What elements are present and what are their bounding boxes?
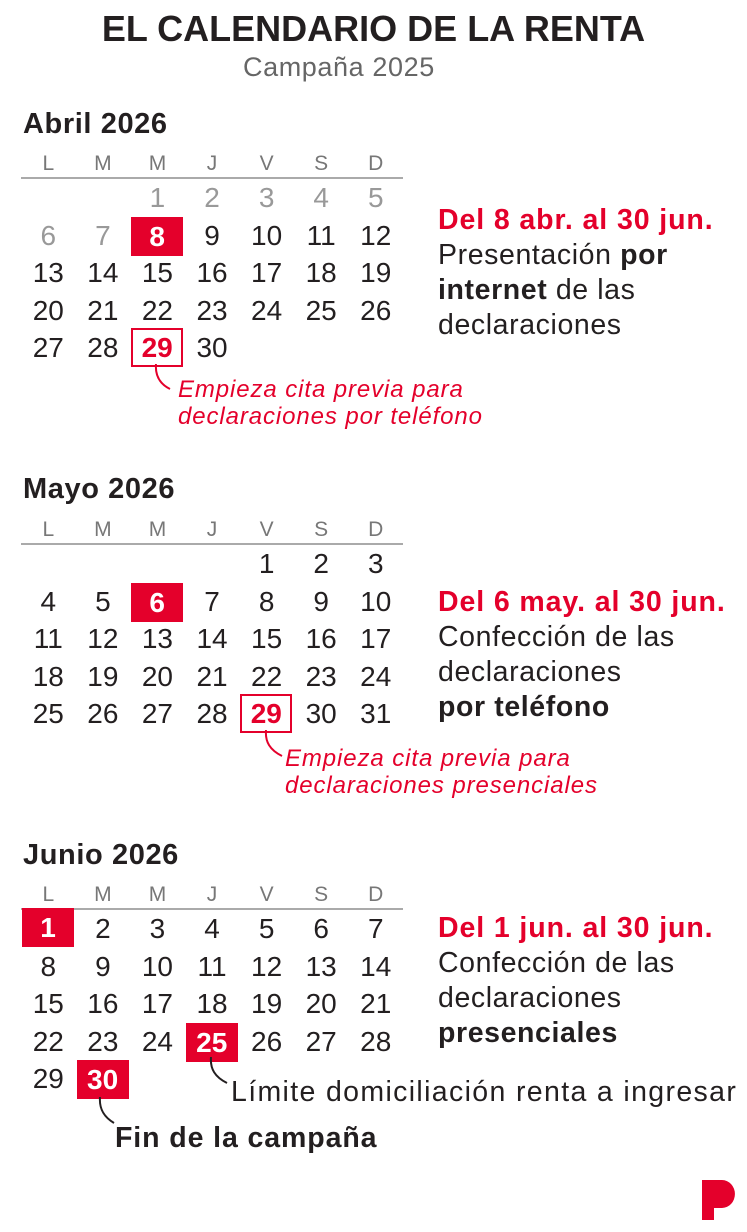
text block: junio: declaraciones: [438, 982, 622, 1014]
calendar: Abril: 12: [360, 220, 391, 250]
calendar: Abril: 16: [196, 257, 228, 288]
calendar: Abril: 10: [251, 220, 282, 250]
calendar: Abril: 20: [33, 294, 64, 326]
calendar: Mayo: 27: [142, 698, 173, 729]
calendar: Junio: L: [42, 883, 54, 906]
text block: junio: [438, 912, 713, 1049]
calendar: Junio: M: [149, 883, 166, 906]
calendar: Abril: L: [42, 152, 54, 175]
calendar: Junio: J: [207, 883, 217, 906]
calendar: Mayo: 19: [87, 660, 118, 692]
calendar: Junio: 17: [142, 988, 173, 1019]
calendar: Junio: 20: [306, 988, 337, 1019]
calendar: Mayo: 22: [251, 660, 282, 692]
calendar: Mayo: 31: [360, 698, 391, 729]
calendar: Mayo: 25: [33, 698, 64, 729]
calendar: Mayo: J: [207, 518, 217, 541]
calendar: Junio: 2: [95, 913, 111, 944]
calendar: Abril: 15: [142, 257, 173, 288]
calendar: Junio: 23: [87, 1026, 118, 1056]
calendar: Mayo: S: [314, 518, 328, 541]
calendar: Mayo: V: [260, 518, 274, 541]
calendar: Junio: 28: [360, 1026, 391, 1056]
callout arrow: junio 30: [98, 1097, 114, 1124]
calendar: Abril: 29: [142, 332, 173, 363]
text block: abril: internet de las: [438, 274, 635, 306]
calendar: Junio: 15: [33, 988, 64, 1019]
callout: abril: [178, 376, 483, 430]
text block: junio: presenciales: [438, 1017, 618, 1049]
calendar: Junio: 21: [360, 988, 391, 1019]
calendar: Junio: 3: [150, 913, 165, 944]
calendar: Abril: 24: [251, 294, 282, 326]
calendar: Mayo: 13: [142, 623, 173, 654]
calendar: Mayo: 8: [259, 586, 274, 616]
text block: mayo: Del 6 may. al 30 jun.: [438, 586, 726, 618]
calendar: Abril: J: [207, 152, 217, 175]
callout: mayo: Empieza cita previa para: [285, 745, 571, 772]
calendar: Abril: 18: [306, 257, 337, 288]
calendar: Abril: 28: [87, 332, 118, 363]
calendar: Mayo: 15: [251, 623, 282, 654]
calendar: Mayo: 9: [313, 586, 329, 616]
calendar: Abril: 4: [313, 182, 329, 213]
callout arrow: mayo 29: [264, 730, 282, 757]
calendar: Junio: 5: [259, 913, 274, 944]
calendar: Mayo: 20: [142, 660, 173, 692]
calendar: Junio: M: [94, 883, 112, 906]
callout: abril: Empieza cita previa para: [178, 376, 464, 403]
calendar: Mayo: [21, 518, 403, 733]
calendar: Abril: 14: [87, 257, 118, 288]
calendar: Mayo: 24: [360, 660, 391, 692]
calendar: Junio: 12: [251, 950, 282, 982]
calendar: Mayo: 1: [259, 548, 274, 579]
calendar: Abril: 11: [307, 220, 336, 250]
calendar: Abril: 25: [306, 294, 337, 326]
calendar: Mayo: 4: [40, 586, 56, 616]
calendar: Abril: 21: [87, 294, 118, 326]
month heading: Abril: Abril 2026: [23, 108, 168, 140]
calendar: Abril: 9: [204, 220, 220, 250]
calendar: Junio: 9: [95, 950, 111, 982]
callout arrow: abril 29: [154, 364, 170, 390]
calendar: Junio: 18: [196, 988, 228, 1019]
calendar: Abril: 1: [150, 182, 165, 213]
text block: mayo: por teléfono: [438, 691, 610, 723]
text block: abril: declaraciones: [438, 309, 622, 341]
calendar: Mayo: 29: [251, 698, 282, 729]
calendar: Mayo: 30: [306, 698, 337, 729]
calendar: Mayo: 6: [149, 586, 165, 618]
calendar: Abril: 22: [142, 294, 173, 326]
month heading: Mayo: Mayo 2026: [23, 473, 175, 505]
calendar: Mayo: M: [94, 518, 112, 541]
calendar: Abril: 26: [360, 294, 391, 326]
calendar: Junio: S: [314, 883, 328, 906]
calendar: Mayo: 23: [306, 660, 337, 692]
calendar: Abril: 23: [196, 294, 228, 326]
calendar: Junio: 13: [306, 950, 337, 982]
calendar: Mayo: 12: [87, 623, 118, 654]
calendar: Mayo: 2: [313, 548, 329, 579]
calendar: Mayo: 10: [360, 586, 391, 616]
calendar: Junio: 22: [33, 1026, 64, 1056]
calendar: Junio: D: [368, 883, 383, 906]
text block: junio: Del 1 jun. al 30 jun.: [438, 912, 713, 944]
calendar: Abril: 8: [149, 220, 165, 252]
calendar: Junio: 10: [142, 950, 173, 982]
calendar: Abril: 7: [95, 220, 111, 250]
callout arrow: junio 25: [210, 1057, 228, 1084]
calendar: Mayo: 17: [360, 623, 391, 654]
calendar: Junio: 7: [368, 913, 384, 944]
calendar: Junio: 6: [313, 913, 329, 944]
calendar: Mayo: D: [368, 518, 383, 541]
calendar: Junio: [21, 883, 403, 1099]
callout: mayo: declaraciones presenciales: [285, 772, 598, 799]
calendar: Abril: 2: [204, 182, 220, 213]
calendar: Junio: 1: [40, 912, 56, 943]
calendar: Junio: 14: [360, 950, 391, 982]
text block: abril: [438, 204, 714, 341]
calendar: Abril: 6: [40, 220, 56, 250]
calendar: Mayo: 21: [196, 660, 228, 692]
calendar: Mayo: 7: [204, 586, 220, 616]
calendar: Mayo: M: [149, 518, 166, 541]
calendar: Abril: V: [260, 152, 274, 175]
calendar: Abril: M: [94, 152, 112, 175]
text block: mayo: [438, 586, 726, 723]
calendar: Junio: 19: [251, 988, 282, 1019]
callout: fin: Fin de la campaña: [115, 1122, 377, 1154]
calendar: Mayo: L: [42, 518, 54, 541]
text block: mayo: declaraciones: [438, 656, 622, 688]
calendar: Mayo: 11: [34, 623, 63, 654]
calendar: Abril: 17: [251, 257, 282, 288]
calendar: Mayo: 14: [196, 623, 228, 654]
text block: junio: Confección de las: [438, 947, 675, 979]
month heading: Junio: Junio 2026: [23, 839, 179, 871]
logo: [702, 1180, 735, 1220]
calendar: Abril: M: [149, 152, 166, 175]
callout: limite: Límite domiciliación renta a ingresar: [231, 1076, 737, 1108]
calendar: Junio: 8: [40, 950, 56, 982]
calendar: Mayo: 3: [368, 548, 384, 579]
callout: abril: declaraciones por teléfono: [178, 403, 483, 430]
calendar: Mayo: 18: [33, 660, 64, 692]
calendar: Junio: V: [260, 883, 274, 906]
text block: abril: Del 8 abr. al 30 jun.: [438, 204, 714, 236]
subtitle: Campaña 2025: [243, 52, 435, 82]
title: EL CALENDARIO DE LA RENTA: [102, 8, 645, 49]
calendar: Abril: S: [314, 152, 328, 175]
calendar: Junio: 11: [197, 950, 227, 982]
calendar: Abril: D: [368, 152, 383, 175]
calendar: Mayo: 16: [306, 623, 337, 654]
calendar: Junio: 16: [87, 988, 118, 1019]
calendar: Junio: 24: [142, 1026, 173, 1056]
calendar: Abril: 5: [368, 182, 384, 213]
calendar: Junio: 29: [33, 1063, 64, 1094]
calendar: Abril: 27: [33, 332, 64, 363]
calendar: Junio: 26: [251, 1026, 282, 1056]
calendar: Junio: 25: [196, 1026, 227, 1058]
calendar: Junio: 30: [87, 1064, 118, 1095]
calendar: Abril: 19: [360, 257, 391, 288]
calendar: Abril: [21, 152, 403, 367]
calendar: Abril: 30: [196, 332, 228, 363]
calendar: Mayo: 5: [95, 586, 111, 616]
calendar: Junio: 4: [204, 913, 220, 944]
calendar: Mayo: 26: [87, 698, 118, 729]
calendar: Mayo: 28: [196, 698, 228, 729]
text block: mayo: Confección de las: [438, 621, 675, 653]
calendar: Junio: 27: [306, 1026, 337, 1056]
text block: abril: Presentación por: [438, 239, 668, 271]
calendar: Abril: 13: [33, 257, 64, 288]
calendar: Abril: 3: [259, 182, 274, 213]
callout: mayo: [285, 745, 598, 799]
